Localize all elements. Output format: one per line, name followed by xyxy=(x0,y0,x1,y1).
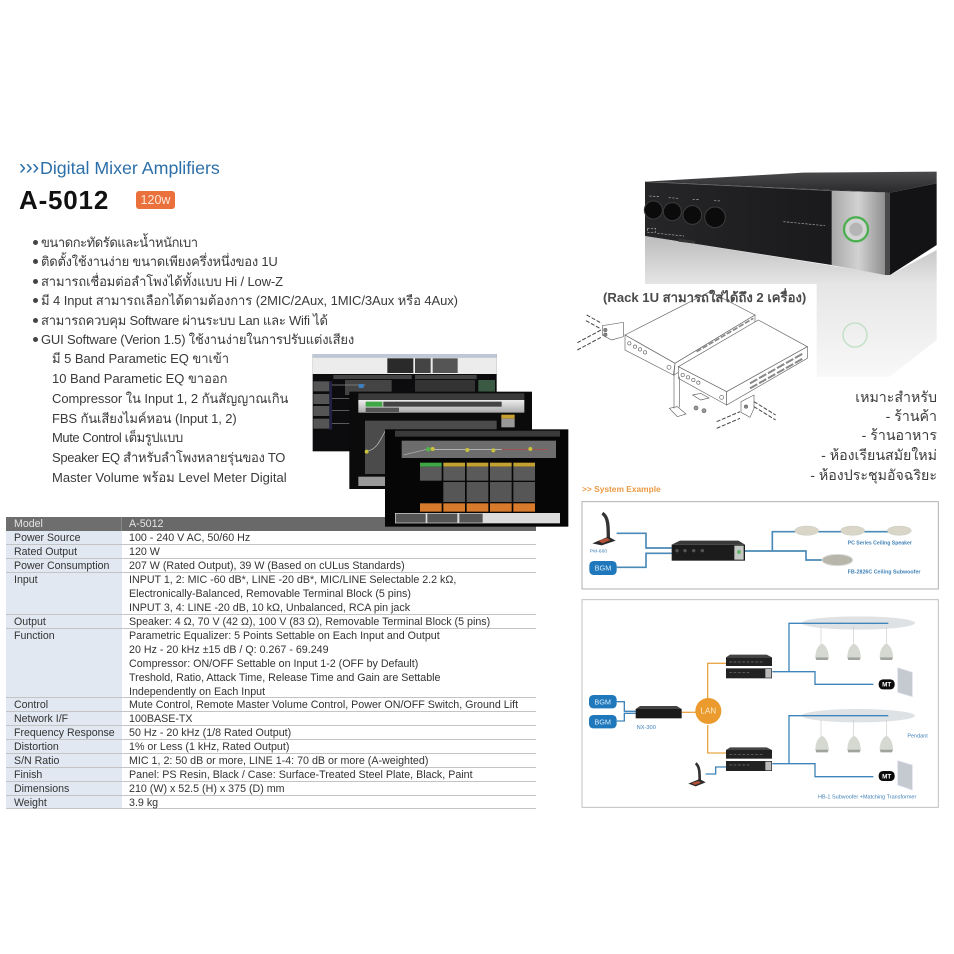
front face xyxy=(645,182,890,275)
GUI software screenshots xyxy=(313,354,568,527)
LAN wiring xyxy=(682,663,727,753)
wall subwoofers xyxy=(898,668,912,790)
suitable venues list: - ร้านอาหาร xyxy=(862,428,937,444)
text: Finish xyxy=(14,769,42,781)
chassis top xyxy=(645,172,937,193)
feature list: GUI Software (Verion 1.5) ใช้งานง่ายในการปรับแต่งเสียง xyxy=(41,332,354,347)
text: Output xyxy=(14,616,46,628)
text: 3.9 kg xyxy=(129,797,158,809)
text: Panel: PS Resin, Black / Case: Surface-Treated Steel Plate, Black, Paint xyxy=(129,769,473,781)
section heading: Digital Mixer Amplifiers xyxy=(40,158,220,178)
feature list: Compressor ใน Input 1, 2 กันสัญญาณเกิน xyxy=(52,391,288,406)
matching transformers xyxy=(879,679,895,781)
feature list: สามารถควบคุม Software ผ่านระบบ Lan และ Wifi ได้ xyxy=(41,313,328,328)
text: Distortion xyxy=(14,741,59,753)
BGM sources: BGM xyxy=(594,718,611,727)
NX-300 unit xyxy=(636,706,682,718)
screenshot: main window xyxy=(313,354,497,451)
panel bevel xyxy=(885,192,890,275)
text: Parametric Equalizer: 5 Points Settable on Each Input and Output xyxy=(129,630,440,642)
knobs xyxy=(644,201,725,228)
power button xyxy=(844,217,868,241)
label subwoofer: FB-2826C Ceiling Subwoofer xyxy=(848,570,920,576)
audio wiring xyxy=(617,623,888,777)
system example heading: >> System Example xyxy=(582,484,661,494)
text: Control xyxy=(14,699,48,711)
upper unit xyxy=(625,292,755,375)
matching transformers: MT xyxy=(882,773,891,780)
feature list: Speaker EQ สำหรับลำโพงหลายรุ่นของ TO xyxy=(52,450,285,465)
left bracket xyxy=(577,315,623,350)
label HB-1: HB-1 Subwoofer +Matching Transformer xyxy=(818,794,916,800)
text: Rated Output xyxy=(14,546,77,558)
text: Power Consumption xyxy=(14,560,109,572)
text: 1% or Less (1 kHz, Rated Output) xyxy=(129,741,289,753)
text: Input xyxy=(14,574,38,586)
desk microphone xyxy=(688,763,706,786)
suitable venues list: - ร้านค้า xyxy=(886,409,937,425)
system diagram one xyxy=(582,502,938,589)
text: 120 W xyxy=(129,546,160,558)
text: INPUT 3, 4: LINE -20 dB, 10 kΩ, Unbalanced, RCA pin jack xyxy=(129,602,410,614)
rubber foot shadow xyxy=(678,238,695,244)
reflection on surface xyxy=(645,236,937,377)
text: 210 (W) x 52.5 (H) x 375 (D) mm xyxy=(129,783,285,795)
ceiling subwoofer xyxy=(822,554,853,566)
feature list: ติดตั้งใช้งานง่าย ขนาดเพียงครึ่งหนึ่งของ 1U xyxy=(41,254,278,269)
system diagram two xyxy=(582,600,938,807)
rack mounting caption: (Rack 1U สามารถใส่ได้ถึง 2 เครื่อง) xyxy=(603,287,806,305)
feature list: 10 Band Parametic EQ ขาออก xyxy=(52,371,227,386)
feature list xyxy=(33,233,458,485)
pendant speakers xyxy=(815,627,893,752)
section heading: ››› xyxy=(19,156,39,179)
suitable venues list: เหมาะสำหรับ xyxy=(855,390,937,406)
text: Electronically-Balanced, Removable Terminal Block (5 pins) xyxy=(129,588,411,600)
signal wiring xyxy=(617,532,888,567)
text: INPUT 1, 2: MIC -60 dB*, LINE -20 dB*, MIC/LINE Selectable 2.2 kΩ, xyxy=(129,574,456,586)
amplifier xyxy=(672,541,745,561)
label PM-660: PM-660 xyxy=(590,548,607,554)
BGM source xyxy=(589,561,617,575)
text: S/N Ratio xyxy=(14,755,59,767)
ceiling speakers xyxy=(795,526,911,535)
suitable venues list: - ห้องประชุมอัจฉริยะ xyxy=(810,468,937,484)
ceiling ellipses xyxy=(802,616,915,630)
feature list: Master Volume พร้อม Level Meter Digital xyxy=(52,470,287,485)
BGM sources: BGM xyxy=(594,698,611,707)
product photo: amplifier xyxy=(644,172,937,377)
text: Weight xyxy=(14,797,47,809)
text: Speaker: 4 Ω, 70 V (42 Ω), 100 V (83 Ω), Removable Terminal Block (5 pins) xyxy=(129,616,490,628)
text: 50 Hz - 20 kHz (1/8 Rated Output) xyxy=(129,727,291,739)
front panel labels xyxy=(647,196,825,236)
upper amplifier stack xyxy=(726,655,772,678)
right bracket xyxy=(717,395,776,428)
text: 100 - 240 V AC, 50/60 Hz xyxy=(129,532,250,544)
text: 100BASE-TX xyxy=(129,713,193,725)
screenshot: input EQ window xyxy=(349,392,532,489)
BGM source: BGM xyxy=(595,564,611,573)
text: MIC 1, 2: 50 dB or more, LINE 1-4: 70 dB or more (A-weighted) xyxy=(129,755,428,767)
silver power panel xyxy=(832,191,885,275)
LAN hub: LAN xyxy=(701,707,716,716)
text: Dimensions xyxy=(14,783,69,795)
rack mounting line drawing xyxy=(577,292,807,428)
suitable venues list xyxy=(810,390,937,484)
desk microphone PM-660 xyxy=(592,513,616,545)
text: Frequency Response xyxy=(14,727,115,739)
label pendant: Pendant xyxy=(907,733,928,739)
text: Independently on Each Input xyxy=(129,686,265,698)
text: Treshold, Ratio, Attack Time, Release Time and Gain are Settable xyxy=(129,672,440,684)
text: Model xyxy=(14,518,43,530)
BGM sources xyxy=(589,695,617,728)
text: Compressor: ON/OFF Settable on Input 1-2 (OFF by Default) xyxy=(129,658,418,670)
feature list: ขนาดกะทัดรัดและน้ำหนักเบา xyxy=(41,235,198,250)
front top edge highlight xyxy=(645,182,832,191)
lower unit xyxy=(678,320,807,405)
lower amplifier stack xyxy=(726,747,772,771)
text: Power Source xyxy=(14,532,81,544)
label PC series: PC Series Ceiling Speaker xyxy=(848,541,912,547)
feature list: Mute Control เต็มรูปแบบ xyxy=(52,430,183,445)
reflected power ring xyxy=(843,323,867,347)
feature list: มี 5 Band Parametic EQ ขาเข้า xyxy=(52,351,229,366)
power badge xyxy=(136,191,175,209)
text: Mute Control, Remote Master Volume Control, Power ON/OFF Switch, Ground Lift xyxy=(129,699,518,711)
model title: A-5012 xyxy=(19,185,109,215)
chassis side xyxy=(890,183,937,275)
specifications table xyxy=(6,172,935,809)
text: 20 Hz - 20 kHz ±15 dB / Q: 0.267 - 69.249 xyxy=(129,644,329,656)
label NX-300: NX-300 xyxy=(637,725,656,731)
text: Network I/F xyxy=(14,713,68,725)
feature list: มี 4 Input สามารถเลือกได้ตามต้องการ (2MIC/2Aux, 1MIC/3Aux หรือ 4Aux) xyxy=(41,293,458,308)
text: A-5012 xyxy=(129,518,163,530)
LAN hub xyxy=(695,698,721,724)
rail plates and screws xyxy=(669,373,709,417)
text: Function xyxy=(14,630,55,642)
matching transformers: MT xyxy=(882,682,891,689)
feature list: FBS กันเสียงไมค์หอน (Input 1, 2) xyxy=(52,411,237,426)
text: 207 W (Rated Output), 39 W (Based on cULus Standards) xyxy=(129,560,405,572)
suitable venues list: - ห้องเรียนสมัยใหม่ xyxy=(821,447,937,464)
feature list: สามารถเชื่อมต่อลำโพงได้ทั้งแบบ Hi / Low-Z xyxy=(41,274,283,289)
screenshot: output EQ window xyxy=(385,429,568,527)
power badge: 120w xyxy=(141,193,170,207)
